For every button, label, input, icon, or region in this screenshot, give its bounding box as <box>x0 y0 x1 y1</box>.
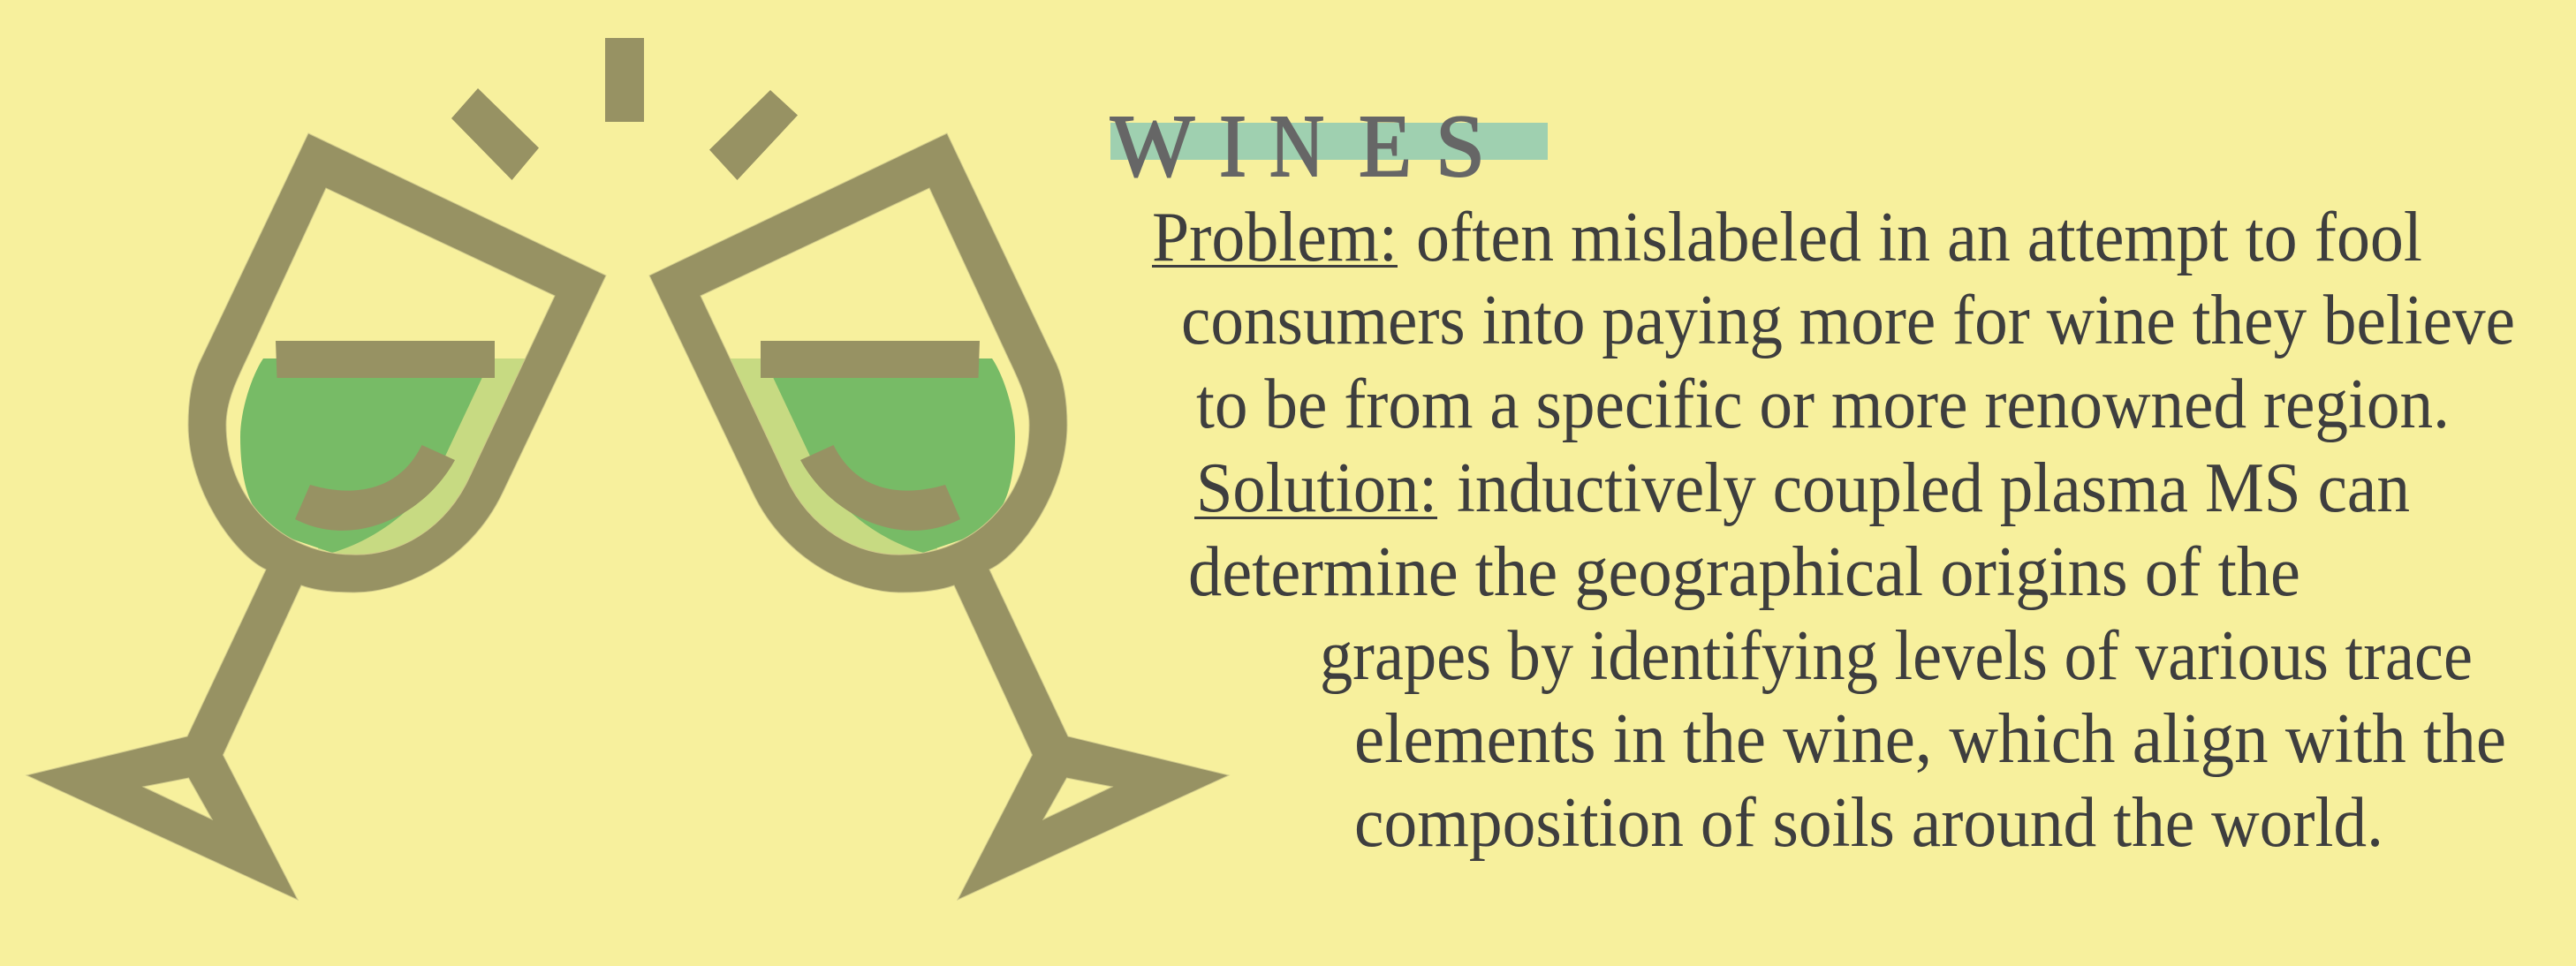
heading: WINES: S <box>1436 96 1485 195</box>
icon: clink spark left <box>451 88 539 180</box>
heading: WINES: N <box>1269 96 1324 195</box>
solution line 1: inductively coupled plasma MS can <box>1457 448 2410 527</box>
heading: WINES <box>1110 96 1485 195</box>
icon: left wine glass <box>27 133 606 900</box>
icon: clink spark right <box>709 90 798 180</box>
problem line 2: consumers into paying more for wine they believe <box>1181 280 2515 359</box>
solution line 5: composition of soils around the world. <box>1354 782 2383 862</box>
icon: right wine glass <box>649 133 1229 900</box>
solution line 2: determine the geographical origins of the <box>1188 532 2300 611</box>
problem label: Problem: <box>1152 197 1398 276</box>
solution line 3: grapes by identifying levels of various trace <box>1320 615 2473 695</box>
icon: clink spark center <box>605 38 644 122</box>
heading: WINES: W <box>1110 96 1195 195</box>
heading: WINES: E <box>1359 96 1412 195</box>
heading highlight bar <box>1110 123 1548 160</box>
problem line 1: often mislabeled in an attempt to fool <box>1416 197 2422 276</box>
text block: problem and solution <box>1152 197 2515 862</box>
problem line 3: to be from a specific or more renowned region. <box>1196 364 2450 443</box>
heading: WINES: I <box>1219 96 1246 195</box>
solution line 4: elements in the wine, which align with the <box>1354 698 2506 778</box>
solution label: Solution: <box>1196 448 1437 527</box>
